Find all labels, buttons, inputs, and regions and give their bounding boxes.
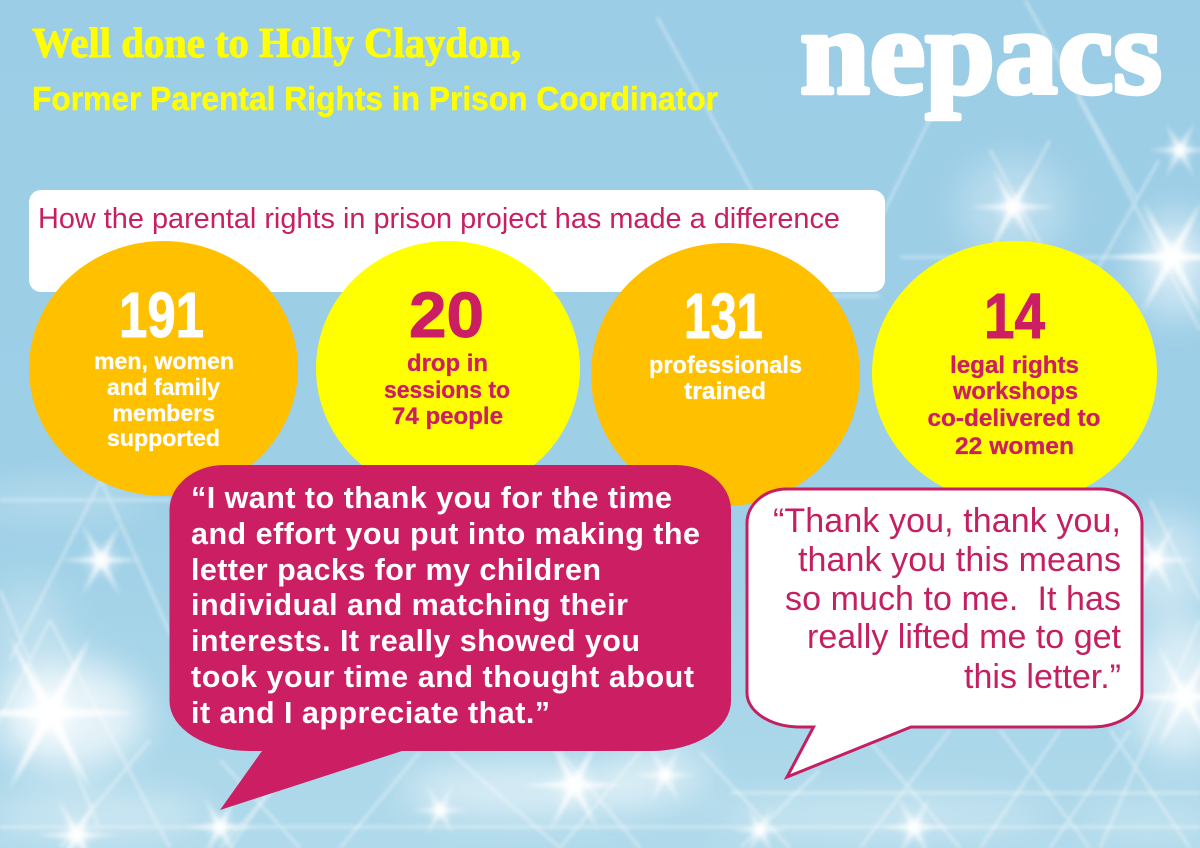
quote text: this letter.” — [964, 658, 1121, 696]
quote text: it and I appreciate that.” — [191, 696, 550, 730]
stat circle: 131 — [591, 243, 860, 506]
quote text: thank you this means — [798, 541, 1121, 579]
label: 74 people — [392, 403, 503, 430]
quote text: “Thank you, thank you, — [773, 502, 1121, 540]
quote text: interests. It really showed you — [191, 624, 640, 658]
quote text — [191, 481, 700, 730]
number: 14 — [984, 280, 1045, 352]
heading: How the parental rights in prison project has made a difference — [38, 203, 840, 235]
stat circle: 191 — [29, 241, 298, 496]
quote text: letter packs for my children — [191, 553, 601, 587]
quote text: took your time and thought about — [191, 660, 694, 694]
quote text — [773, 502, 1122, 696]
title — [32, 21, 718, 117]
quote text: really lifted me to get — [807, 618, 1122, 656]
label — [94, 348, 234, 451]
label — [928, 352, 1100, 460]
number: 131 — [684, 280, 763, 352]
quote text: individual and matching their — [191, 588, 628, 622]
label: trained — [684, 378, 766, 405]
label: sessions to — [384, 377, 510, 404]
quote text: and effort you put into making the — [191, 517, 700, 551]
stat circle: 20 — [316, 241, 580, 496]
quote text: so much to me. It has — [785, 580, 1121, 618]
label: supported — [107, 425, 220, 451]
label: 22 women — [955, 433, 1074, 460]
label: workshops — [952, 378, 1078, 405]
label: drop in — [407, 350, 488, 377]
label: co-delivered to — [928, 405, 1100, 432]
title line 1: Well done to Holly Claydon, — [32, 21, 521, 67]
label: professionals — [649, 352, 802, 379]
label — [649, 352, 802, 405]
number: 191 — [119, 279, 204, 351]
stat circle: 14 — [872, 241, 1157, 505]
quote text: “I want to thank you for the time — [191, 481, 672, 515]
speech bubble: white quote — [747, 489, 1142, 777]
label: men, women — [94, 348, 234, 374]
label: members — [112, 400, 215, 426]
label — [384, 350, 510, 430]
number: 20 — [409, 279, 484, 351]
speech bubble: magenta quote — [169, 465, 731, 810]
label: and family — [107, 374, 220, 400]
label: legal rights — [950, 352, 1079, 379]
panel: heading banner — [29, 190, 885, 292]
title line 2: Former Parental Rights in Prison Coordinator — [32, 80, 718, 117]
